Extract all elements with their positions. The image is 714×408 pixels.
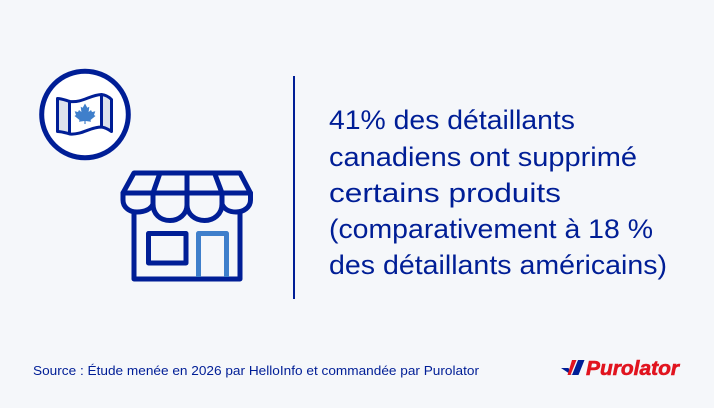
main statement: canadiens ont supprimé [329,142,637,172]
store awning [123,173,250,220]
main statement [329,105,667,280]
store body [134,213,240,279]
icon: storefront [123,173,250,279]
store window [148,234,186,263]
main statement: certains produits [329,178,561,208]
icon: Canadian flag in circle [42,71,128,158]
logo: Purolator: Purolator [586,358,680,380]
source note: Source : Étude menée en 2026 par HelloInfo et commandée par Purolator [33,363,480,378]
main statement: 41% des détaillants [329,105,575,135]
main statement: des détaillants américains) [329,250,667,280]
main statement: (comparativement à 18 % [329,214,653,244]
divider [293,76,295,299]
store door [198,234,226,277]
icon: maple leaf [74,104,96,124]
